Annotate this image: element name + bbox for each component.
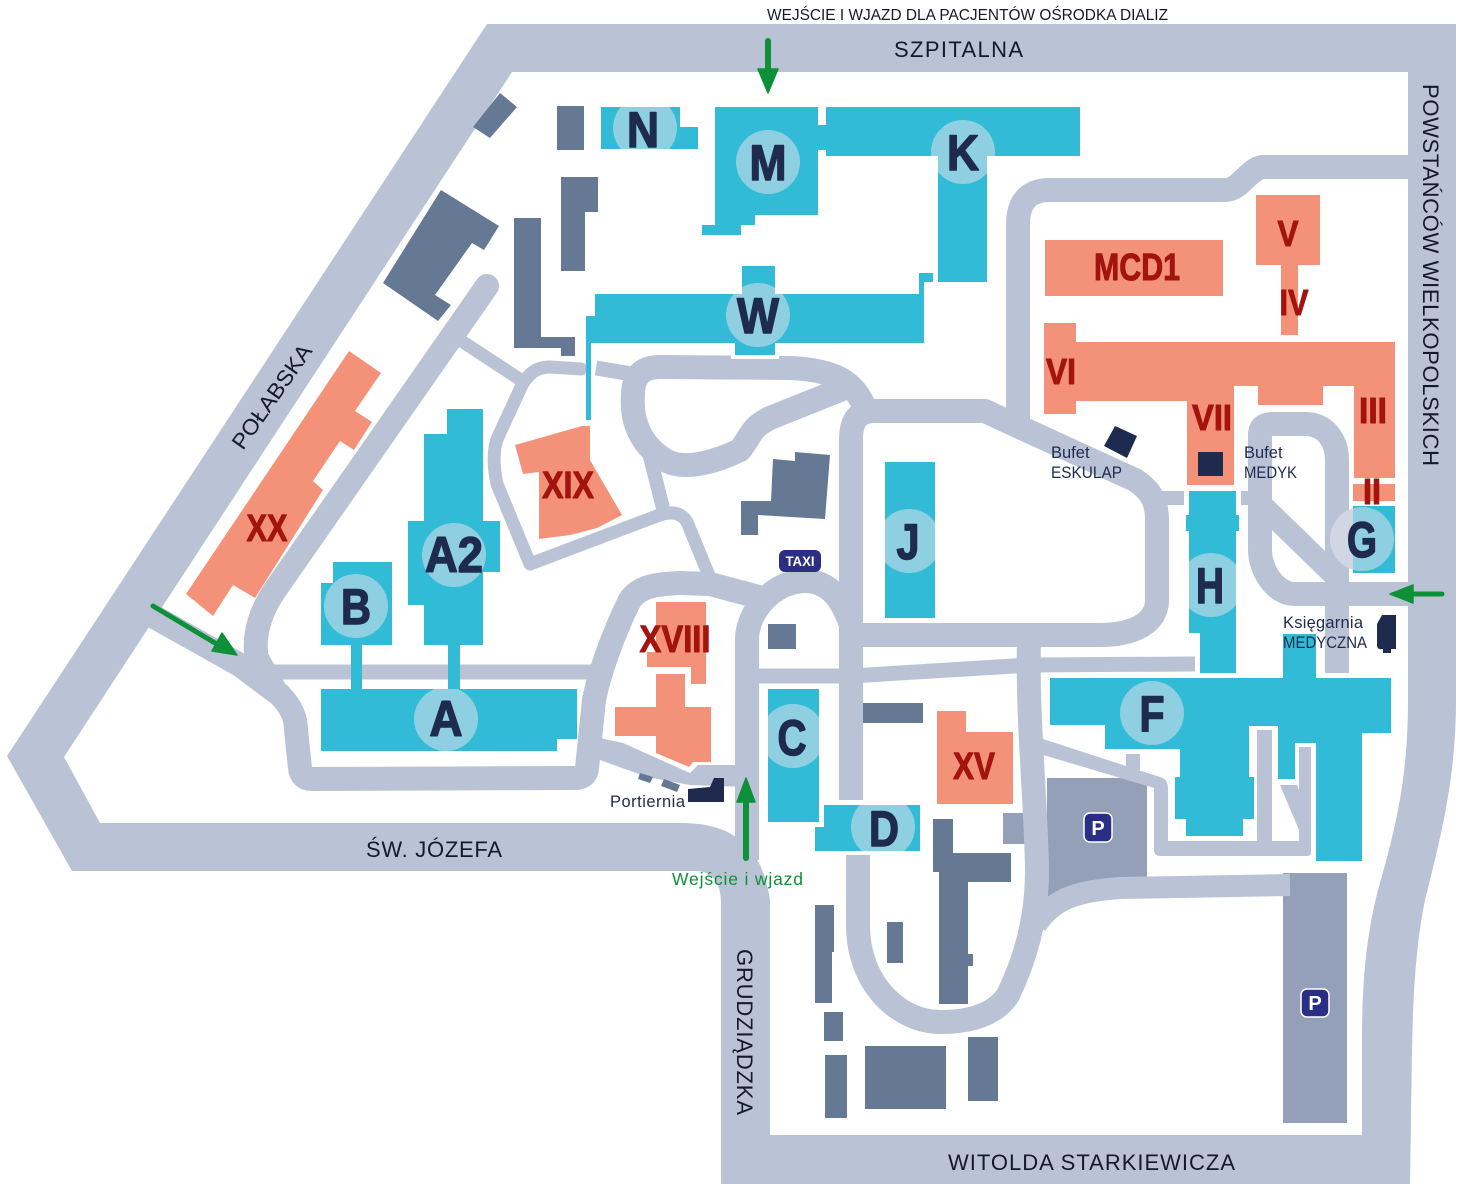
parking badge central: P: [1091, 818, 1105, 840]
buildings VI VII III: VI: [1046, 351, 1076, 392]
parking area: southeast: [1283, 873, 1347, 1123]
label: Portiernia: Portiernia: [610, 793, 686, 811]
icon: Bufet Eskulap: [1104, 426, 1137, 458]
building G: [1330, 506, 1395, 573]
building A with connectors: A: [430, 691, 462, 747]
building: unlabeled slate northwest: [383, 93, 598, 356]
internal roads: [140, 167, 1410, 1022]
building C: [768, 689, 819, 822]
building XX: XX: [246, 508, 288, 550]
small grey parking block: [1003, 813, 1029, 844]
building V and IV: V: [1278, 213, 1298, 254]
building F: F: [1140, 686, 1164, 742]
label: Księgarnia Medyczna: MEDYCZNA: [1283, 634, 1367, 652]
taxi badge: TAXI: [786, 554, 814, 569]
building J: J: [896, 514, 920, 570]
label: Bufet Medyk: Bufet: [1244, 444, 1283, 462]
building MCD1: [1045, 240, 1223, 296]
building XIX: [515, 426, 622, 539]
label: main entrance: Wejście i wjazd: [672, 869, 803, 889]
building D: [815, 805, 920, 851]
building XIX: XIX: [542, 465, 595, 507]
building B: [321, 562, 392, 645]
street label: Powstańców Wielkopolskich: POWSTAŃCÓW WIELKOPOLSKICH: [1418, 84, 1443, 466]
building II: II: [1363, 471, 1381, 512]
parking badge central: [1084, 813, 1112, 842]
icon: Księgarnia Medyczna: [1377, 615, 1396, 653]
building A2: [408, 409, 500, 645]
street label: Połabska: POŁABSKA: [227, 339, 317, 454]
building G: G: [1347, 512, 1377, 568]
label: Bufet Eskulap: Bufet: [1051, 444, 1090, 462]
parking badge southeast: [1301, 989, 1329, 1017]
street label: Szpitalna: SZPITALNA: [894, 37, 1023, 62]
buildings VI VII III: III: [1359, 390, 1387, 431]
arrow: east entrance: [1390, 585, 1442, 603]
building M: M: [750, 135, 786, 191]
building J: [885, 462, 935, 618]
building: unlabeled slate centre: [741, 452, 923, 723]
arrow: main entrance: [737, 778, 755, 858]
street label: Grudziądzka: GRUDZIĄDZKA: [732, 949, 757, 1115]
parking area: central: [1047, 778, 1147, 900]
building M: [702, 107, 826, 235]
arrow: west entrance: [153, 606, 237, 655]
building D: D: [869, 801, 899, 857]
building XV: XV: [953, 746, 996, 788]
label: Bufet Eskulap: ESKULAP: [1051, 464, 1122, 482]
building XV: [937, 711, 1013, 804]
building XVIII: [615, 602, 711, 767]
building XVIII: XVIII: [640, 619, 710, 661]
icon: Bufet Medyk: [1198, 452, 1223, 476]
building V and IV: [1256, 195, 1320, 335]
buildings VI VII III: [1044, 323, 1395, 485]
street label: Witolda Starkiewicza: WITOLDA STARKIEWICZA: [948, 1150, 1235, 1175]
building MCD1: MCD1: [1094, 247, 1180, 289]
building F: [1050, 634, 1391, 861]
building XX: [186, 351, 381, 616]
building H: H: [1196, 558, 1224, 614]
building K: [826, 107, 1080, 282]
building: unlabeled slate south: [638, 773, 1011, 1118]
building B: B: [341, 579, 371, 635]
building A2: A2: [425, 527, 483, 583]
heading: dialysis entrance note: WEJŚCIE I WJAZD DLA PACJENTÓW OŚRODKA DIALIZ: [767, 5, 1168, 24]
building II: [1353, 471, 1395, 512]
building K: K: [947, 125, 979, 181]
arrow: top entrance: [758, 41, 778, 93]
icon: Portiernia: [688, 778, 724, 802]
building W: W: [737, 288, 780, 344]
building V and IV: IV: [1280, 282, 1308, 323]
building H: [1186, 491, 1239, 673]
building N: N: [627, 102, 659, 158]
building A with connectors: [321, 640, 577, 751]
taxi badge: [779, 550, 821, 572]
building C: C: [778, 710, 806, 766]
label: Bufet Medyk: MEDYK: [1244, 464, 1297, 482]
building N: [601, 107, 698, 149]
parking badge southeast: P: [1308, 993, 1322, 1015]
building W: [586, 266, 933, 420]
street label: Św. Józefa: ŚW. JÓZEFA: [366, 837, 502, 862]
label: Księgarnia Medyczna: Księgarnia: [1283, 614, 1364, 632]
buildings VI VII III: VII: [1192, 397, 1232, 438]
